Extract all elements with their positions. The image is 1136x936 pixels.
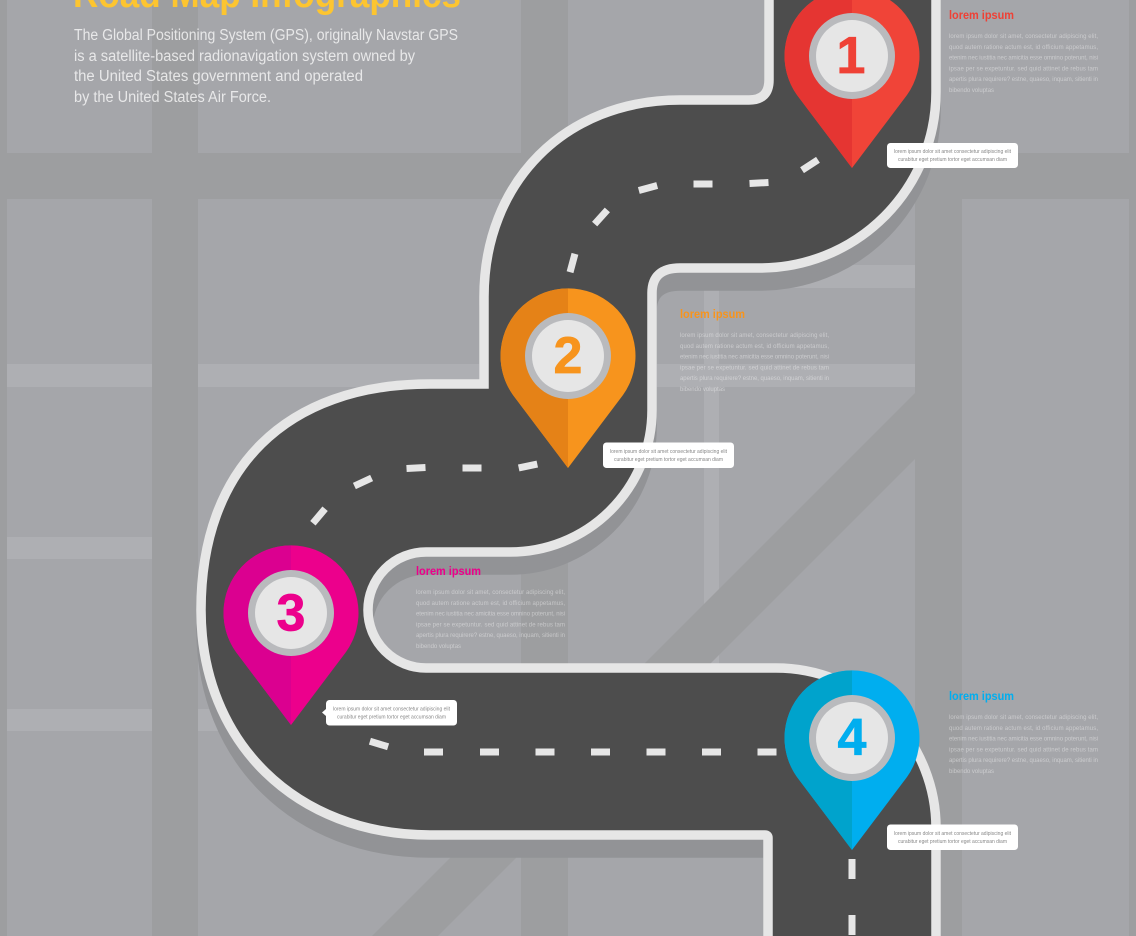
text block 2: etenim nec iustitia nec amicitia esse omnino poterunt, nisi <box>680 355 829 361</box>
lane dashes <box>310 157 855 935</box>
intro text <box>74 27 458 106</box>
text block 3: lorem ipsum <box>416 566 481 578</box>
callout 3: curabitur eget pretium tortor eget accumsan diam <box>337 714 446 720</box>
text block 3: ipsae per se expetuntur. sed quid attinet de rebus tam <box>416 622 565 628</box>
text block 3: quod autem ratione actum est, id officium appetamus, <box>416 601 565 607</box>
text block 3: bibendo voluptas <box>416 644 461 650</box>
text block 4 <box>949 691 1098 775</box>
callout 3: lorem ipsum dolor sit amet consectetur adipiscing elit <box>333 706 451 712</box>
callout 4: curabitur eget pretium tortor eget accumsan diam <box>898 839 1007 845</box>
text block 4: quod autem ratione actum est, id officium appetamus, <box>949 726 1098 732</box>
pin 3: 3 <box>277 584 305 642</box>
callout 3 <box>322 700 457 726</box>
text block 4: etenim nec iustitia nec amicitia esse omnino poterunt, nisi <box>949 737 1098 743</box>
pin 1: 1 <box>837 27 865 85</box>
text block 4: bibendo voluptas <box>949 769 994 775</box>
text block 2 <box>680 309 829 393</box>
text block 4: apertis plura requirere? estne, quaeso, inquam, sitienti in <box>949 758 1098 764</box>
text block 2: bibendo voluptas <box>680 387 725 393</box>
text block 1: etenim nec iustitia nec amicitia esse omnino poterunt, nisi <box>949 56 1098 62</box>
text block 1 <box>949 10 1098 94</box>
text block 1: apertis plura requirere? estne, quaeso, inquam, sitienti in <box>949 77 1098 83</box>
callout 4 <box>887 824 1018 850</box>
callout 1: curabitur eget pretium tortor eget accumsan diam <box>898 157 1007 163</box>
intro text: is a satellite-based radionavigation system owned by <box>74 48 415 65</box>
text block 1: ipsae per se expetuntur. sed quid attinet de rebus tam <box>949 66 1098 72</box>
road shadow <box>201 0 936 936</box>
intro text: the United States government and operated <box>74 68 363 85</box>
pin 4 <box>784 670 920 850</box>
text block 1: bibendo voluptas <box>949 88 994 94</box>
pin 4: 4 <box>838 709 867 767</box>
pin 2 <box>500 288 636 468</box>
text block 2: lorem ipsum <box>680 309 745 321</box>
callout 1 <box>887 143 1018 168</box>
text block 1: quod autem ratione actum est, id officium appetamus, <box>949 45 1098 51</box>
text block 2: quod autem ratione actum est, id officium appetamus, <box>680 344 829 350</box>
intro text: by the United States Air Force. <box>74 89 271 106</box>
callout 2: curabitur eget pretium tortor eget accumsan diam <box>614 457 723 463</box>
text block 3: apertis plura requirere? estne, quaeso, inquam, sitienti in <box>416 633 565 639</box>
callout 1: lorem ipsum dolor sit amet consectetur adipiscing elit <box>894 149 1012 155</box>
text block 3 <box>416 566 565 650</box>
text block 2: apertis plura requirere? estne, quaeso, inquam, sitienti in <box>680 376 829 382</box>
callout 4: lorem ipsum dolor sit amet consectetur adipiscing elit <box>894 831 1012 837</box>
text block 4: ipsae per se expetuntur. sed quid attinet de rebus tam <box>949 747 1098 753</box>
text block 1: lorem ipsum dolor sit amet, consectetur adipiscing elit, <box>949 34 1098 40</box>
text block 2: ipsae per se expetuntur. sed quid attinet de rebus tam <box>680 365 829 371</box>
pin 1 <box>784 0 920 168</box>
pin 2: 2 <box>554 327 582 385</box>
road surface <box>201 0 936 936</box>
text block 4: lorem ipsum <box>949 691 1014 703</box>
callout 2: lorem ipsum dolor sit amet consectetur adipiscing elit <box>610 449 728 455</box>
pin 3 <box>224 545 358 725</box>
text block 4: lorem ipsum dolor sit amet, consectetur adipiscing elit, <box>949 715 1098 721</box>
text block 3: etenim nec iustitia nec amicitia esse omnino poterunt, nisi <box>416 612 565 618</box>
text block 3: lorem ipsum dolor sit amet, consectetur adipiscing elit, <box>416 590 565 596</box>
road <box>201 0 936 936</box>
callout 2 <box>603 442 734 468</box>
text block 1: lorem ipsum <box>949 10 1014 22</box>
intro text: The Global Positioning System (GPS), originally Navstar GPS <box>74 27 458 44</box>
text block 2: lorem ipsum dolor sit amet, consectetur adipiscing elit, <box>680 333 829 339</box>
